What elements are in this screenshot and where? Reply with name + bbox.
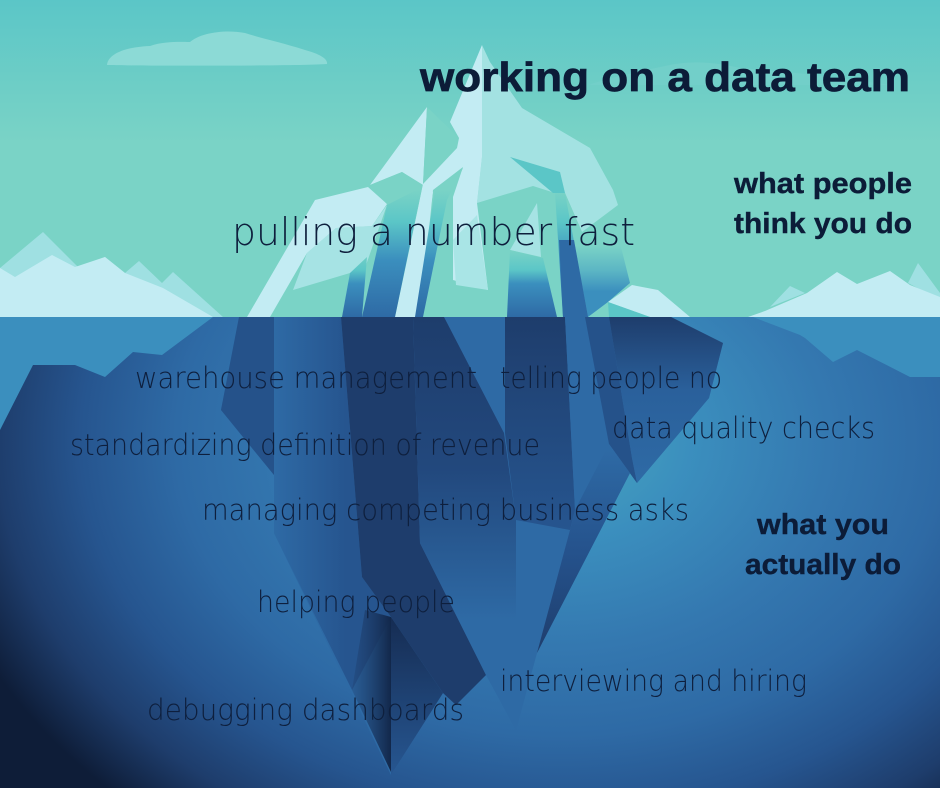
water background (0, 317, 940, 788)
label: what you actually do: actually do (745, 549, 901, 581)
text: data quality checks: data quality checks (612, 411, 875, 445)
label: what people think you do: what people (733, 168, 912, 200)
text: debugging dashboards: debugging dashboards (147, 693, 464, 727)
text: helping people: helping people (257, 585, 455, 619)
small ice chunk (608, 285, 690, 317)
central dark band (341, 317, 486, 705)
submerged mountain range and deep water (0, 317, 940, 788)
right upper facet (609, 317, 723, 483)
cloud right (588, 62, 890, 85)
iceberg below water (221, 317, 723, 775)
background icebergs right (748, 263, 940, 317)
label: what people think you do: think you do (734, 208, 912, 240)
text: standardizing definition of revenue: standardizing definition of revenue (70, 428, 540, 462)
text: managing competing business asks: managing competing business asks (202, 493, 689, 527)
title: working on a data team (419, 54, 910, 100)
right dark streak (585, 317, 637, 483)
sky background (0, 0, 940, 318)
background icebergs left (0, 232, 223, 317)
central peak bright ice (396, 45, 488, 317)
label: what you actually do: what you (756, 509, 889, 541)
upper left triangle (370, 107, 427, 185)
main body (221, 317, 723, 775)
right light facet (565, 317, 609, 510)
bottom dark shard right (391, 617, 443, 775)
left dark facet (221, 317, 274, 475)
label: what you actually do (745, 509, 901, 581)
text: interviewing and hiring: interviewing and hiring (500, 664, 807, 698)
lower right wedge (537, 444, 630, 653)
dithered left face (293, 205, 387, 290)
text: pulling a number fast: pulling a number fast (232, 210, 635, 254)
blue streaks (362, 187, 422, 317)
cloud left (107, 31, 327, 66)
centre facet fading (413, 317, 516, 675)
lighter column (274, 317, 391, 690)
iceberg above water (247, 45, 690, 317)
bottom dark shard left (352, 610, 391, 772)
text: warehouse management: warehouse management (135, 361, 477, 395)
bright ice left slope (247, 187, 387, 317)
right dark column (505, 317, 575, 530)
text: telling people no: telling people no (500, 361, 722, 395)
label: what people think you do (733, 168, 912, 240)
dithered upper right face (477, 45, 618, 232)
dithered small triangle (510, 203, 541, 257)
